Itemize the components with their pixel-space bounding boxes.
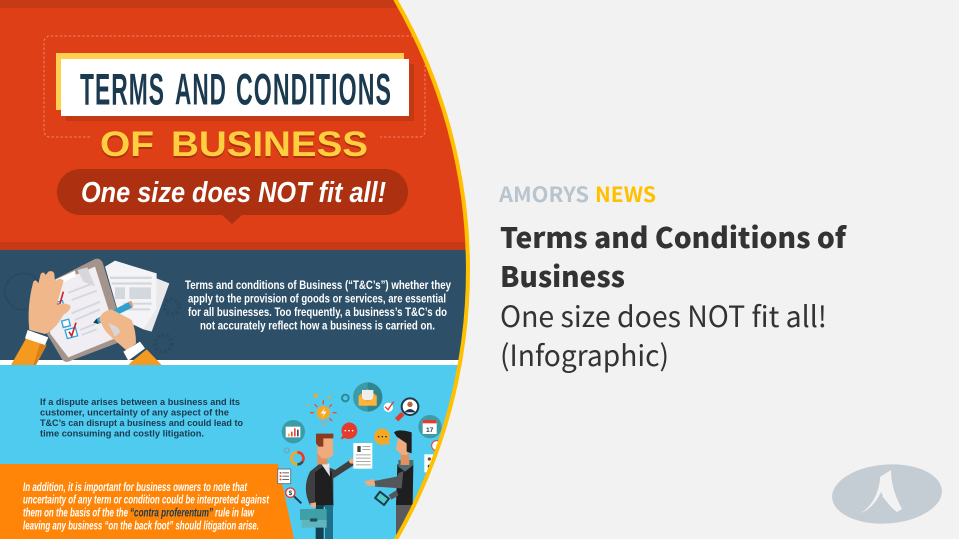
icon: calendar: 17 [426, 427, 434, 434]
document [353, 443, 372, 469]
pencil [93, 301, 133, 324]
article subtitle: (Infographic) [500, 333, 669, 375]
businessman left [300, 434, 354, 539]
icon: donut chart [291, 452, 303, 464]
orange callout: uncertainty of any term or condition could be interpreted against [23, 494, 270, 506]
title banner: TERMS [80, 66, 165, 114]
dispute paragraph [40, 397, 243, 440]
brand label [498, 179, 656, 209]
orange callout: rule in law [215, 508, 255, 520]
icon: profile card [424, 454, 434, 472]
icon: envelope [353, 382, 382, 412]
intro paragraph [185, 278, 451, 332]
dispute paragraph: T&C’s can disrupt a business and could lead to [40, 418, 243, 429]
icon: small gear [284, 448, 289, 453]
subtitle: of business: BUSINESS [171, 127, 368, 166]
title banner: AND [175, 66, 227, 114]
illustration: hands signing clipboard [5, 259, 179, 365]
icon: checklist [278, 469, 291, 484]
logo badge [830, 461, 944, 527]
subtitle: of business [102, 131, 366, 158]
panel: header band [0, 0, 480, 250]
title banner: CONDITIONS [236, 66, 392, 114]
intro paragraph: apply to the provision of goods or services, are essential [188, 292, 446, 306]
panel: infographic crop [0, 0, 480, 539]
article title: Terms and Conditions of [500, 216, 848, 257]
title banner [56, 53, 414, 121]
subtitle: of business: BUSINESS [171, 125, 368, 164]
intro paragraph: Terms and conditions of Business (“T&C’s”) whether they [185, 278, 451, 292]
brand label: NEWS [595, 179, 656, 209]
subtitle: of business: OF [100, 127, 154, 166]
dispute paragraph: time consuming and costly litigation. [40, 428, 204, 440]
icon: orange speech bubble [374, 428, 391, 445]
panel: light blue section [0, 365, 480, 539]
orange callout: “contra proferentum” [130, 508, 213, 520]
businessman right [364, 430, 413, 539]
panel: dark blue intro [0, 250, 480, 365]
article title [500, 216, 848, 296]
icon: clock [431, 440, 438, 451]
yellow curved edge [393, 0, 470, 539]
orange callout [0, 464, 294, 539]
brand label: AMORYS [498, 179, 589, 209]
article subtitle [500, 294, 827, 375]
intro paragraph: for all businesses. Too frequently, a business’s T&C’s do [188, 305, 447, 319]
orange callout: In addition, it is important for business owners to note that [23, 482, 248, 494]
dispute paragraph: If a dispute arises between a business and its [40, 397, 240, 408]
icon: red speech bubble [341, 422, 357, 439]
speech pill: One size does NOT fit all! [81, 177, 386, 209]
right hand [99, 309, 162, 365]
left hand [11, 271, 71, 365]
dispute paragraph: customer, uncertainty of any aspect of the [40, 408, 229, 418]
icon: lightbulb [307, 394, 337, 427]
illustration: businessmen and icons [278, 382, 442, 539]
orange callout: leaving any business “on the back foot” should litigation arise. [23, 520, 259, 532]
article title: Business [500, 255, 625, 296]
icon: person magnifier [395, 398, 418, 421]
subtitle: of business: OF [100, 125, 154, 164]
speech pill [57, 169, 408, 224]
icon: chart circle [282, 420, 305, 443]
icon: calendar [418, 415, 442, 438]
article subtitle: One size does NOT fit all! [500, 294, 827, 336]
intro paragraph: not accurately reflect how a business is carried on. [200, 318, 435, 332]
icon: dollar magnifier: $ [289, 490, 293, 497]
icon: check badge [384, 402, 394, 412]
orange callout: them on the basis of the the [23, 508, 128, 520]
icon: gear [342, 395, 349, 401]
icon: dollar magnifier [286, 488, 301, 503]
